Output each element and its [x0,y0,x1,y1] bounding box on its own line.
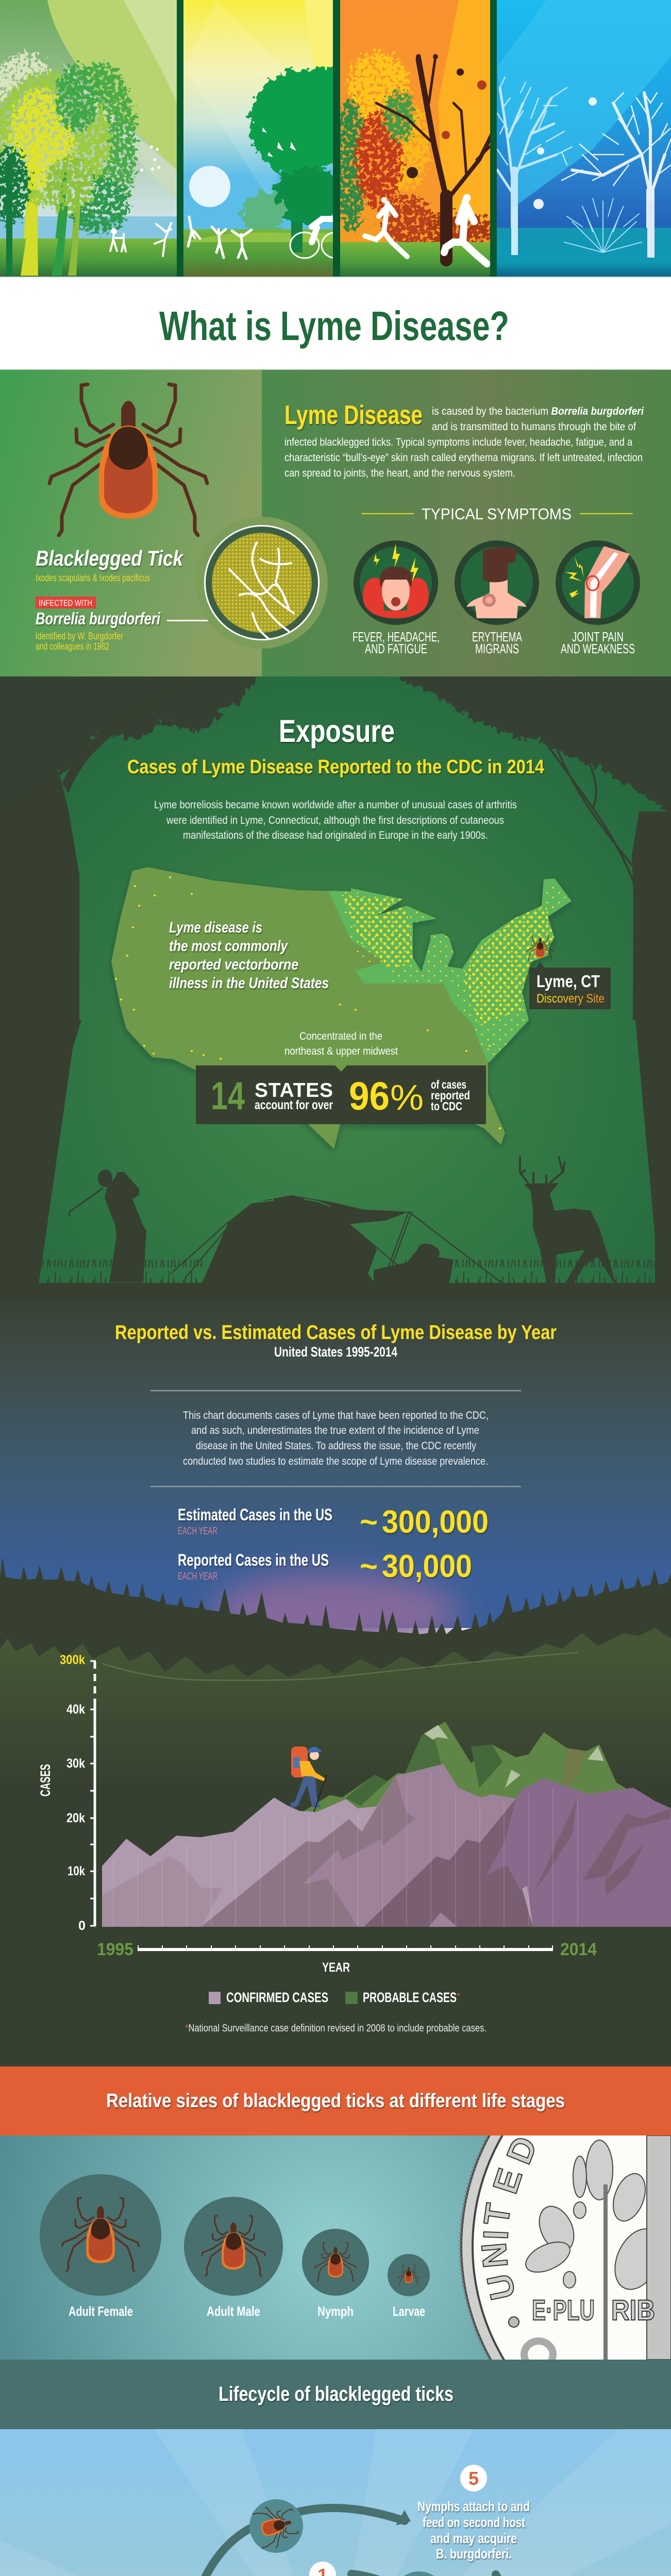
y axis: 0 [78,1919,86,1933]
stat box: 14 states 96 percent: 14 [211,1074,245,1118]
map callout: Lyme disease is [169,919,262,936]
tick latin names: Ixodes scapularis & Ixodes pacificus [36,573,150,584]
stat box: 14 states 96 percent: account for over [255,1098,333,1112]
section: exposure forest background [0,659,671,1303]
exposure description: manifestations of the disease had originated in Europe in the early 1900s. [183,829,488,841]
tick name: Blacklegged Tick [36,546,184,570]
tick: nymph: Nymph [317,2303,354,2319]
silhouette: golfer [69,1170,146,1282]
stat box: 14 states 96 percent: reported [431,1089,470,1102]
legend [209,1990,460,2005]
tick: adult female: Adult Female [69,2303,133,2319]
node: eggs [392,2571,446,2576]
stat: estimated cases [178,1504,489,1540]
icon: tick on Lyme CT [527,935,553,961]
legend: PROBABLE CASES [363,1990,457,2005]
icon: dime: RIB [611,2294,655,2326]
identification credit [36,631,124,652]
identification credit: Identified by W. Burgdorfer [36,631,124,642]
typical symptoms heading: TYPICAL SYMPTOMS [422,505,572,523]
area chart [38,1653,671,2034]
Lyme CT label: Lyme, CT [536,972,600,991]
exposure description [154,799,517,841]
symptom labels: JOINT PAIN [572,629,624,645]
exposure subheading: Cases of Lyme Disease Reported to the CDC in 2014 [127,756,544,778]
stat box: 14 states 96 percent: STATES [255,1079,333,1101]
infected with label [36,597,96,608]
icon: hiker [290,1747,327,1812]
right tree canopy [398,659,671,819]
icon: male runner [444,201,487,264]
exposure description: were identified in Lyme, Connecticut, although the first descriptions of cutaneous [166,815,504,826]
panel: left tick panel [0,370,262,677]
chart description: and as such, underestimates the true extent of the incidence of Lyme [191,1425,479,1436]
y axis: 300k [60,1653,85,1667]
band: lifecycle heading [0,2360,671,2429]
icon: erythema migrans [455,540,539,625]
step 5: B. burgdorferi. [436,2546,512,2562]
stat: estimated cases: EACH YEAR [178,1526,217,1537]
icon: child jumping [155,223,171,256]
x axis: 2014 [560,1940,597,1959]
x axis: 1995 [97,1940,133,1959]
ground silhouette [0,1283,671,1303]
y axis: 10k [68,1864,85,1878]
header: four seasons illustration [0,0,671,278]
chart description: conducted two studies to estimate the scope of Lyme disease prevalence. [183,1455,488,1467]
y axis: 30k [66,1756,85,1771]
step 5 [417,2465,530,2562]
icon: dime: I [476,2229,516,2241]
y axis: 40k [66,1702,85,1717]
concentrated note [284,1030,398,1057]
legend: CONFIRMED CASES [226,1990,328,2005]
left tree trunk [0,773,81,1284]
section: chart background [0,1557,671,2066]
panel: tick sizes [0,2013,671,2480]
cycle arrows [173,2508,546,2576]
panel: summer [183,0,333,277]
step 5: feed on second host [423,2515,525,2530]
stat: reported cases [178,1549,472,1584]
x axis: YEAR [322,1960,350,1975]
band: relative sizes heading [0,2066,671,2136]
step 1 [288,2562,359,2576]
infected with label: INFECTED WITH [39,598,92,608]
tick: nymph [302,2229,369,2319]
title: What is Lyme Disease? [159,303,509,349]
icon: brown autumn tree [376,54,502,260]
icon: dime: E [485,2164,530,2198]
concentrated note: Concentrated in the [299,1030,382,1042]
x axis [97,1940,597,1975]
section: what is Lyme disease [0,369,671,677]
tick: adult female [40,2174,161,2319]
node: adult tick [249,2499,303,2553]
map callout: the most commonly [169,938,288,955]
icon: dime: D [499,2131,545,2170]
grass silhouette [37,1260,660,1291]
panel: right description panel [262,370,671,677]
concentrated note: northeast & upper midwest [284,1045,398,1057]
year grid lines [113,1772,578,1926]
step 5: and may acquire [430,2531,517,2546]
US map [111,867,611,1149]
dark treeline [0,1557,671,1803]
stat box: 14 states 96 percent [196,1065,486,1124]
connector line [167,620,220,621]
chart heading: Reported vs. Estimated Cases of Lyme Disease by Year [115,1321,557,1344]
panel: lifecycle diagram [0,2429,671,2576]
map callout: reported vectorborne [169,956,298,973]
icon: dime: N [474,2241,515,2269]
icon: bare tree left [511,170,518,252]
identification credit: and colleagues in 1982 [36,641,109,652]
icon: blacklegged tick [49,384,207,535]
panel: autumn [340,0,490,277]
y axis: CASES [38,1764,53,1797]
icon: female runner [365,204,407,257]
stat: estimated cases: ~ [360,1504,378,1540]
stat: reported cases: EACH YEAR [178,1571,217,1582]
exposure description: Lyme borreliosis became known worldwide after a number of unusual cases of arthritis [154,799,517,811]
band: relative sizes heading: Relative sizes of blacklegged ticks at different life stages [106,2090,565,2112]
chart subheading: United States 1995-2014 [274,1344,397,1360]
left tree canopy [0,659,284,832]
stat: reported cases: ~ [360,1549,378,1584]
icon: cheering child [232,230,251,259]
map callout: illness in the United States [169,975,329,992]
footnote: *National Surveillance case definition revised in 2008 to include probable cases. [185,2023,487,2034]
icon: dime: U [479,2270,523,2303]
bacterium name: Borrelia burgdorferi [36,609,161,628]
exposure heading: Exposure [279,714,395,749]
tick: larvae: Larvae [393,2303,425,2319]
icon: bare bush [564,198,642,252]
description text [284,405,644,479]
band: lifecycle heading: Lifecycle of blacklegged ticks [219,2383,454,2405]
map: high-incidence region [325,871,577,1061]
panel: spring [0,0,177,277]
icon: dime: E·PLU [532,2294,595,2326]
confirmed cases: purple mountains [102,1764,671,1927]
symptom labels: FEVER, HEADACHE, [353,629,440,645]
chart description [183,1410,489,1467]
stat box: 14 states 96 percent: 96 [349,1074,390,1118]
tick: adult male [184,2197,283,2319]
background dark fill [0,1793,671,2066]
stat: estimated cases: Estimated Cases in the US [178,1505,332,1524]
description text: and is transmitted to humans through the bite of [432,421,636,433]
stat: reported cases: Reported Cases in the US [178,1551,329,1569]
Lyme CT label: Discovery Site [536,992,605,1006]
icon: joint pain [556,540,640,625]
icon: dime [460,2013,671,2480]
step 5: Nymphs attach to and [417,2499,530,2514]
tick: adult male: Adult Male [207,2303,260,2319]
symptom labels: AND WEAKNESS [561,641,635,656]
silhouette: tent with camper [171,1195,501,1285]
icon: fever headache fatigue [354,540,438,625]
Lyme Disease heading: Lyme Disease [284,400,423,430]
symptom labels [353,629,635,656]
section: reported vs estimated [0,1298,671,1651]
right tree trunk [632,811,671,1288]
symptom labels: ERYTHEMA [472,629,522,645]
chart description: disease in the United States. To address the issue, the CDC recently [196,1440,476,1452]
icon: magnified bacteria [196,517,328,649]
icon: dime: T [477,2201,518,2228]
step 5: 5 [468,2468,479,2489]
stat box: 14 states 96 percent: to CDC [431,1099,462,1113]
y axis [38,1653,96,1933]
tick: larvae [388,2254,430,2319]
y axis: 20k [66,1811,85,1825]
stat: estimated cases: 300,000 [382,1504,489,1540]
light treeline [0,1628,671,1803]
icon: cyclist [290,232,333,259]
chart description: This chart documents cases of Lyme that have been reported to the CDC, [183,1410,489,1421]
probable cases: green peaks [304,1722,639,1855]
description text: is caused by the bacterium Borrelia burgdorferi [432,405,644,417]
map callout [169,919,329,992]
symptom labels: AND FATIGUE [365,641,427,656]
legend: * [457,1991,460,1999]
stat: reported cases: 30,000 [382,1549,472,1584]
icon: running child [212,227,226,258]
description text: can spread to joints, the heart, and the nervous system. [284,467,515,479]
stat box: 14 states 96 percent: % [390,1077,424,1117]
icon: bare tree right [646,191,655,258]
icon: jumping child [188,217,200,246]
silhouette: deer [520,1157,616,1291]
symptom labels: MIGRANS [475,641,519,656]
stat box: 14 states 96 percent: of cases [431,1078,466,1091]
panel: winter [497,0,671,277]
icon: children holding hands [110,233,126,251]
Lyme CT label [529,962,611,1009]
